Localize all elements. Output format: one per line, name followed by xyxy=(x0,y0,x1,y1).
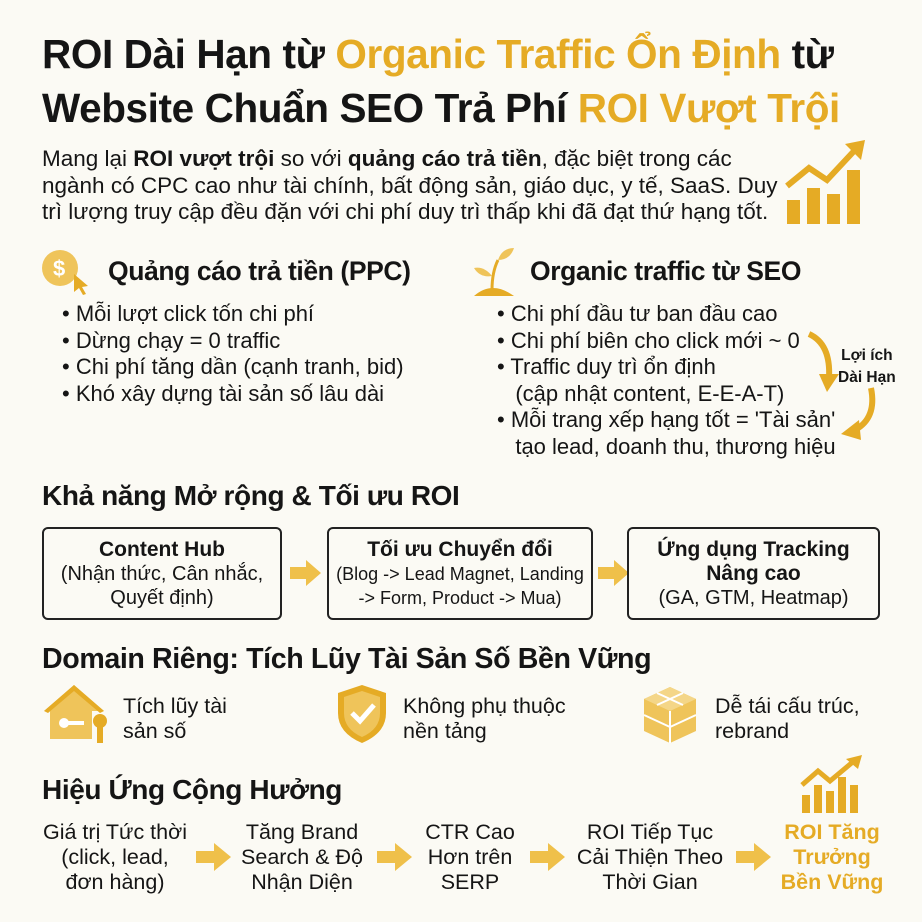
icon: cube xyxy=(644,687,696,743)
intro paragraph: ngành có CPC cao như tài chính, bất động sản, giáo dục, y tế, SaaS. Duy xyxy=(42,172,778,198)
text xyxy=(715,694,860,743)
box: tracking: Nâng cao xyxy=(706,562,801,585)
icon: shield xyxy=(338,685,386,743)
text: Không phụ thuộc xyxy=(403,694,566,718)
intro paragraph: trì lượng truy cập đều đặn với chi phí duy trì thấp khi đã đạt thứ hạng tốt. xyxy=(42,199,768,224)
box: tracking: (GA, GTM, Heatmap) xyxy=(658,587,849,609)
box: content hub xyxy=(42,527,282,620)
title: Website Chuẩn SEO Trả Phí ROI Vượt Trội xyxy=(42,85,840,131)
flow: step 3 xyxy=(425,820,515,894)
arrow xyxy=(196,843,231,871)
box: conversion: Tối ưu Chuyển đổi xyxy=(367,538,553,561)
Organic bullets: (cập nhật content, E-E-A-T) xyxy=(515,380,784,406)
box: conversion xyxy=(327,527,593,620)
box: conversion: -> Form, Product -> Mua) xyxy=(358,588,562,608)
Organic heading: Organic traffic từ SEO xyxy=(530,256,801,286)
flow: step 3: CTR Cao xyxy=(425,820,515,844)
heading: scalability: Khả năng Mở rộng & Tối ưu ROI xyxy=(42,480,459,511)
callout: long-term benefit: Lợi ích xyxy=(841,347,893,364)
icon: coin click: $ xyxy=(53,256,65,281)
box: tracking xyxy=(627,527,880,620)
icon: coin click xyxy=(42,250,88,295)
arrow xyxy=(736,843,771,871)
flow: final: Bền Vững xyxy=(781,870,883,894)
Organic bullets: • Traffic duy trì ổn định xyxy=(497,354,716,379)
icon: sprout xyxy=(474,248,514,296)
flow: final: ROI Tăng xyxy=(784,820,880,844)
callout: long-term benefit: Dài Hạn xyxy=(838,369,896,386)
panel: Organic xyxy=(474,248,836,458)
icon: house key xyxy=(44,685,107,743)
text xyxy=(123,694,227,743)
flow: final: Trưởng xyxy=(793,845,871,869)
flow: step 2 xyxy=(241,820,363,894)
heading: resonance: Hiệu Ứng Cộng Hưởng xyxy=(42,774,342,805)
flow: step 4: ROI Tiếp Tục xyxy=(587,820,713,844)
text: sản số xyxy=(123,719,186,743)
flow: step 2: Tăng Brand xyxy=(246,820,358,844)
PPC bullets: • Chi phí tăng dần (cạnh tranh, bid) xyxy=(62,354,404,379)
Organic bullets: • Mỗi trang xếp hạng tốt = 'Tài sản' xyxy=(497,407,835,432)
arrow xyxy=(530,843,565,871)
flow: step 3: SERP xyxy=(441,870,499,894)
intro paragraph: Mang lại ROI vượt trội so với quảng cáo trả tiền, đặc biệt trong các xyxy=(42,146,732,171)
flow: step 1 xyxy=(43,820,187,894)
callout: long-term benefit xyxy=(838,347,896,386)
panel: PPC xyxy=(42,250,411,406)
PPC bullets xyxy=(62,301,404,406)
box: tracking: Ứng dụng Tracking xyxy=(657,538,850,561)
flow: step 1: (click, lead, xyxy=(61,845,169,869)
flow: step 4 xyxy=(577,820,723,894)
text: Dễ tái cấu trúc, xyxy=(715,694,860,718)
PPC bullets: • Mỗi lượt click tốn chi phí xyxy=(62,301,314,326)
text: rebrand xyxy=(715,719,789,743)
intro paragraph xyxy=(42,146,778,224)
text: nền tảng xyxy=(403,719,487,743)
arrow xyxy=(377,843,412,871)
flow: step 1: Giá trị Tức thời xyxy=(43,820,187,844)
box: content hub: (Nhận thức, Cân nhắc, xyxy=(61,563,263,585)
Organic bullets: • Chi phí đầu tư ban đầu cao xyxy=(497,301,778,326)
item: restructure xyxy=(644,687,860,743)
item: independent xyxy=(338,685,566,743)
flow: step 2: Nhận Diện xyxy=(251,870,353,894)
item: accumulate xyxy=(44,685,227,743)
flow: step 1: đơn hàng) xyxy=(66,870,164,894)
title: ROI Dài Hạn từ Organic Traffic Ổn Định từ xyxy=(42,31,834,77)
box: conversion: (Blog -> Lead Magnet, Landing xyxy=(336,564,584,584)
icon: small growth chart xyxy=(800,755,862,813)
flow: step 4: Thời Gian xyxy=(602,870,698,894)
flow: step 4: Cải Thiện Theo xyxy=(577,845,723,869)
Organic bullets xyxy=(497,301,836,458)
text: Tích lũy tài xyxy=(123,694,227,718)
flow: step 3: Hơn trên xyxy=(428,845,512,869)
icon: growth chart xyxy=(785,140,865,224)
Organic bullets: tạo lead, doanh thu, thương hiệu xyxy=(515,434,836,458)
title xyxy=(42,31,840,131)
arrow 1 xyxy=(290,560,321,586)
text xyxy=(403,694,566,743)
PPC heading: Quảng cáo trả tiền (PPC) xyxy=(108,256,411,286)
heading: domain: Domain Riêng: Tích Lũy Tài Sản Số Bền Vững xyxy=(42,643,651,675)
arrow 2 xyxy=(598,560,627,586)
flow: final xyxy=(781,820,883,894)
box: content hub: Content Hub xyxy=(99,538,225,561)
flow: step 2: Search & Độ xyxy=(241,845,363,869)
PPC bullets: • Khó xây dựng tài sản số lâu dài xyxy=(62,380,384,406)
arrows: curved benefit xyxy=(808,331,876,440)
box: content hub: Quyết định) xyxy=(110,587,214,609)
PPC bullets: • Dừng chạy = 0 traffic xyxy=(62,328,280,352)
Organic bullets: • Chi phí biên cho click mới ~ 0 xyxy=(497,328,800,352)
